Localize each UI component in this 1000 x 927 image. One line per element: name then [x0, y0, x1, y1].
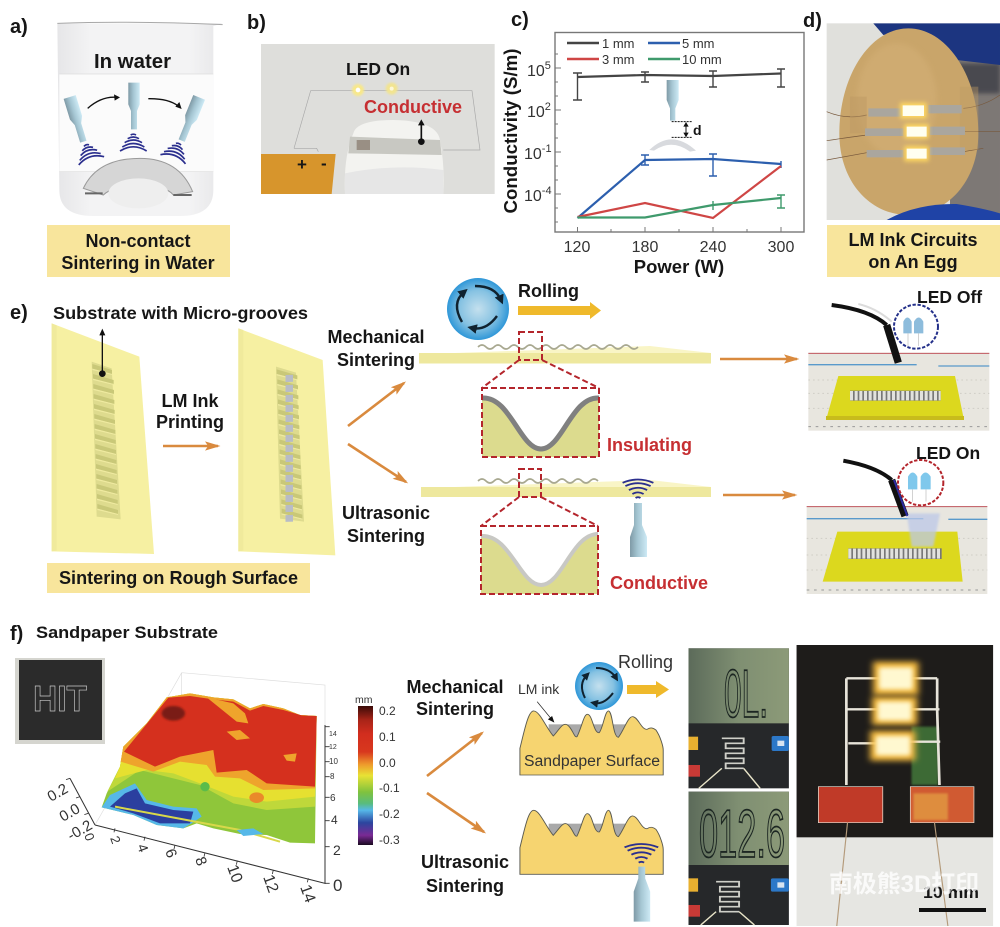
- x axis tick labels: [81, 831, 318, 905]
- arrow: to ultrasonic: [348, 444, 406, 482]
- watermark: 南极熊3D打印: [829, 871, 979, 898]
- z axis tick labels: 0.2: [44, 780, 71, 805]
- arrow: printing: [163, 445, 218, 447]
- label f: f): [10, 623, 23, 645]
- label: mechanical sintering f: Sintering: [416, 699, 494, 719]
- photo: LED off breadboard: [808, 304, 989, 431]
- caption box a: Sintering in Water: [61, 253, 215, 273]
- heading: in water: In water: [94, 51, 171, 73]
- panel a: non-contact sintering in water: [10, 16, 230, 277]
- substrate with empty grooves: [52, 323, 154, 554]
- label a: a): [10, 16, 28, 38]
- x axis tick labels: 240: [700, 239, 726, 256]
- arrow: rolling f: [627, 681, 669, 698]
- label: mechanical sintering f: Mechanical: [406, 677, 504, 697]
- y axis tick labels: -1: [542, 143, 552, 155]
- substrate with printed ink: [238, 328, 335, 555]
- x axis tick labels: 10: [223, 863, 245, 885]
- zoom inset: conductive: [481, 469, 598, 594]
- legend: 10 mm: [682, 52, 722, 67]
- label: insulating: Insulating: [607, 435, 692, 455]
- label: LM ink printing: LM Ink: [162, 391, 219, 411]
- label c: c): [511, 9, 529, 31]
- x axis title: Power (W): [634, 256, 724, 277]
- label d: d): [803, 10, 822, 32]
- y axis tick labels: 4: [331, 813, 338, 827]
- sandpaper cross-section: ultrasonic: [520, 810, 663, 922]
- label: rolling f: Rolling: [618, 652, 673, 672]
- x axis tick labels: 180: [632, 239, 658, 256]
- label: ultrasonic sintering: Ultrasonic: [342, 503, 430, 523]
- colour bar: 0.1: [379, 730, 396, 744]
- slab mechanical sintering: [419, 345, 711, 364]
- conductive label: Conductive: [364, 97, 462, 117]
- scale label: 10 mm: [923, 883, 979, 902]
- label b: b): [247, 12, 266, 34]
- label: substrate with micro-grooves: Substrate with Micro-grooves: [53, 303, 308, 323]
- y axis tick labels: 2: [545, 101, 551, 113]
- panel d: LM ink circuits on egg: [803, 10, 1000, 277]
- colour bar: -0.2: [379, 807, 400, 821]
- photo with circuit on foam: [261, 44, 495, 194]
- label: sandpaper surface: Sandpaper Surface: [524, 753, 660, 770]
- ultrasonic probe with waves: [623, 480, 653, 557]
- caption box d: [827, 225, 1000, 277]
- inset: nozzle and distance d: [649, 80, 696, 152]
- label: mechanical sintering: Sintering: [337, 350, 415, 370]
- beaker illustration: [57, 22, 223, 216]
- series 5 mm: [578, 154, 781, 218]
- plus and minus: -: [321, 154, 327, 173]
- x axis tick labels: 14: [296, 883, 318, 905]
- plus and minus: +: [297, 155, 307, 174]
- distance label d: d: [693, 122, 702, 138]
- caption box d: on An Egg: [868, 252, 958, 272]
- y axis tick labels: 10: [329, 757, 338, 766]
- caption box a: [47, 225, 230, 277]
- arrow: f to ultrasonic: [427, 793, 484, 832]
- label: mechanical sintering f: [406, 677, 504, 719]
- y axis tick labels: 12: [329, 744, 337, 751]
- x axis tick labels: 8: [191, 855, 210, 868]
- arrow: to mechanical: [348, 383, 404, 426]
- photo: multimeter OL reading: 0L.: [724, 656, 768, 732]
- y axis tick labels: 14: [329, 731, 337, 738]
- 3D surface plot: [44, 673, 342, 905]
- panel e: sintering on rough surface: [10, 278, 989, 594]
- x axis tick labels: 6: [161, 847, 180, 860]
- label e: e): [10, 302, 28, 324]
- photo: multimeter OL reading: [689, 648, 789, 788]
- photo: HIT sandpaper sample: [15, 658, 105, 744]
- photo: multimeter 12.6 reading: [689, 792, 789, 925]
- arrow: to LED off: [720, 358, 797, 360]
- label: LM ink printing: Printing: [156, 412, 224, 432]
- legend: 1 mm: [602, 36, 634, 51]
- colour bar: mm: [355, 694, 373, 706]
- panel f: sandpaper substrate: [10, 623, 993, 926]
- photo: LED on breadboard: [807, 460, 987, 594]
- colour bar: 0.2: [379, 704, 396, 718]
- y axis tick labels: 10: [527, 104, 545, 121]
- label: ultrasonic sintering f: Ultrasonic: [421, 852, 509, 872]
- axes and surface: [66, 673, 330, 883]
- heading: sandpaper substrate: Sandpaper Substrate: [36, 623, 218, 642]
- x axis tick labels: 120: [564, 239, 590, 256]
- series 1 mm: [573, 69, 785, 100]
- y axis tick labels: 0: [333, 876, 342, 895]
- z axis tick labels: 0.0: [56, 800, 83, 825]
- arrow: rolling direction: [518, 302, 601, 319]
- panel b: LED on photo: [247, 12, 495, 194]
- plus and minus: [297, 154, 327, 174]
- colour bar: 0.0: [379, 756, 396, 770]
- label: mechanical sintering: Mechanical: [327, 327, 425, 347]
- rolling ball f: [575, 662, 623, 710]
- x axis tick labels: 0: [81, 831, 98, 843]
- x axis tick labels: 300: [768, 239, 794, 256]
- label: ultrasonic sintering: Sintering: [347, 526, 425, 546]
- caption box e: Sintering on Rough Surface: [59, 567, 298, 588]
- colour bar: -0.3: [379, 833, 400, 847]
- colour bar: [355, 694, 400, 847]
- x axis tick labels: 4: [134, 842, 152, 855]
- y axis tick labels: -4: [542, 185, 552, 197]
- y axis tick labels: 8: [330, 772, 335, 781]
- label: conductive: Conductive: [610, 573, 708, 593]
- scale bar: [919, 908, 986, 912]
- label: LM ink printing: [156, 391, 224, 432]
- colour bar: -0.1: [379, 781, 400, 795]
- label: ultrasonic sintering: [342, 503, 430, 546]
- label: mechanical sintering: [327, 327, 425, 370]
- rolling ball: [447, 278, 509, 340]
- slab ultrasonic sintering: [421, 479, 711, 497]
- caption box e: [47, 563, 310, 593]
- z axis tick labels: [44, 780, 95, 844]
- x axis tick labels: 12: [259, 873, 281, 895]
- label: LED on: LED On: [916, 443, 980, 463]
- panel c: conductivity chart: [501, 9, 804, 277]
- y axis tick labels: 10: [527, 63, 545, 80]
- y axis tick labels: 10: [524, 188, 542, 205]
- legend: [567, 36, 722, 67]
- label: rolling: Rolling: [518, 281, 579, 301]
- label: ultrasonic sintering f: [421, 852, 509, 896]
- plot frame and ticks: [555, 32, 804, 232]
- y axis tick labels: [524, 60, 552, 205]
- photo: multimeter 12.6 reading: 012.6: [699, 796, 785, 872]
- series 3 mm: [578, 166, 781, 218]
- x axis tick labels: 2: [107, 834, 124, 846]
- legend: 3 mm: [602, 52, 634, 67]
- y axis title: Conductivity (S/m): [501, 48, 521, 214]
- x axis tick labels: [564, 239, 794, 256]
- y axis tick labels: 6: [330, 793, 336, 804]
- arrow: to LED on: [723, 494, 795, 496]
- label: LED off: LED Off: [917, 287, 982, 307]
- y axis tick labels: 2: [333, 842, 341, 858]
- y axis tick labels: 10: [524, 146, 542, 163]
- photo: HIT sandpaper sample: HIT: [33, 678, 87, 719]
- series 10 mm: [578, 195, 785, 218]
- y axis tick labels: 5: [545, 60, 551, 72]
- zoom inset: insulating: [482, 332, 599, 457]
- y axis tick labels: [329, 731, 342, 895]
- label: ultrasonic sintering f: Sintering: [426, 876, 504, 896]
- caption box a: Non-contact: [86, 231, 190, 251]
- z axis tick labels: -0.2: [64, 817, 95, 844]
- LED on label: LED On: [346, 59, 410, 79]
- sandpaper cross-section: mechanical: [520, 702, 663, 775]
- line chart: [501, 32, 804, 277]
- legend: 5 mm: [682, 36, 714, 51]
- caption box d: LM Ink Circuits: [848, 230, 978, 250]
- label: LM ink: LM ink: [518, 681, 560, 697]
- arrow: f to mechanical: [427, 733, 482, 776]
- photo: sandpaper LED circuit: [797, 645, 993, 926]
- egg photo: [827, 23, 1000, 220]
